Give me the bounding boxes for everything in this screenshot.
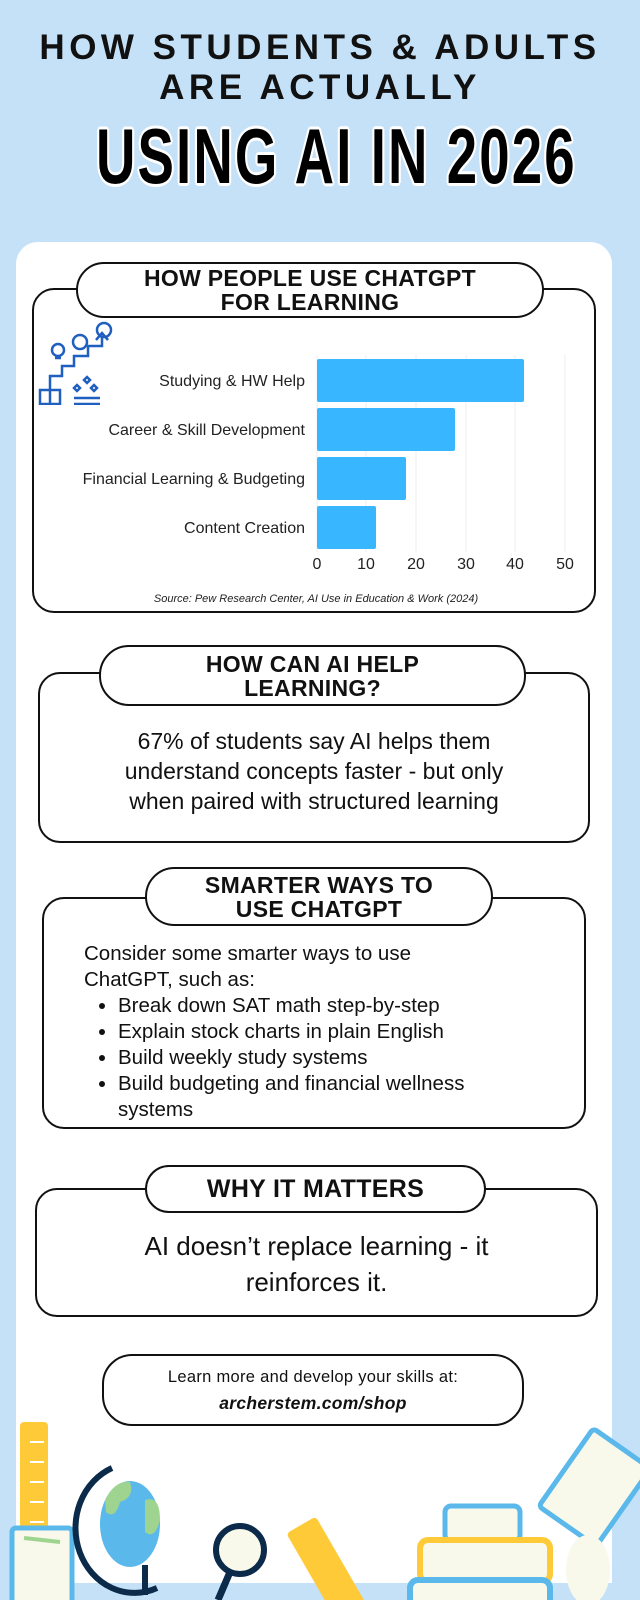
bar chart: 10 — [357, 556, 375, 573]
heading: chatgpt learning — [76, 262, 544, 318]
title: USING AI IN 2026 — [96, 112, 577, 200]
bar chart: Source: Pew Research Center, AI Use in Education & Work (2024) — [154, 593, 478, 605]
icon: growth stairs — [38, 322, 112, 405]
bar chart: Studying & HW Help — [159, 373, 305, 390]
list text: Explain stock charts in plain English — [118, 1020, 444, 1043]
list text: Build weekly study systems — [118, 1046, 368, 1069]
text block: AI doesn’t replace learning - it — [145, 1231, 488, 1261]
title: HOW STUDENTS & ADULTS — [39, 28, 601, 67]
title: ARE ACTUALLY — [159, 68, 481, 107]
bar chart: Content Creation — [184, 520, 305, 537]
heading: smarter ways: SMARTER WAYS TO — [205, 872, 433, 898]
heading: smarter ways — [145, 867, 493, 926]
illustration: school supplies — [10, 1422, 640, 1600]
heading: why it matters: WHY IT MATTERS — [207, 1175, 424, 1203]
bottom strip — [0, 1583, 640, 1600]
text block: 67% of students say AI helps them — [138, 728, 490, 754]
list text: Consider some smarter ways to use — [84, 942, 411, 965]
heading: how can AI help: LEARNING? — [244, 674, 381, 700]
heading: smarter ways: USE CHATGPT — [236, 896, 402, 922]
bar chart: 30 — [457, 556, 475, 573]
panel: how AI helps — [38, 672, 590, 843]
text block — [144, 1231, 488, 1297]
text block — [125, 728, 504, 814]
text block: understand concepts faster - but only — [125, 758, 503, 784]
list text: Break down SAT math step-by-step — [118, 994, 440, 1017]
list text: ChatGPT, such as: — [84, 968, 255, 991]
heading: how can AI help — [99, 645, 526, 706]
bar chart: Career & Skill Development — [108, 422, 306, 439]
callout: learn more — [102, 1354, 524, 1426]
bar chart: 0 — [313, 556, 322, 573]
list text: Build budgeting and financial wellness systems — [118, 1072, 464, 1121]
callout: learn more: archerstem.com/shop — [219, 1393, 407, 1413]
list text — [84, 942, 464, 1121]
title — [39, 28, 601, 200]
bar chart — [83, 355, 574, 605]
bar chart: Financial Learning & Budgeting — [83, 471, 305, 488]
heading: chatgpt learning: HOW PEOPLE USE CHATGPT — [144, 265, 476, 291]
bar chart: 40 — [506, 556, 524, 573]
heading: how can AI help: HOW CAN AI HELP — [206, 650, 419, 676]
bar chart: 20 — [407, 556, 425, 573]
heading: chatgpt learning: FOR LEARNING — [221, 289, 399, 315]
bar chart: 50 — [556, 556, 574, 573]
panel: chatgpt learning chart — [32, 288, 596, 613]
text block: reinforces it. — [246, 1267, 387, 1297]
heading: why it matters — [145, 1165, 486, 1213]
white content panel — [16, 242, 612, 1587]
panel: smarter ways — [42, 897, 586, 1129]
callout: learn more: Learn more and develop your skills at: — [168, 1368, 458, 1386]
text block: when paired with structured learning — [129, 788, 499, 814]
panel: why it matters — [35, 1188, 598, 1317]
